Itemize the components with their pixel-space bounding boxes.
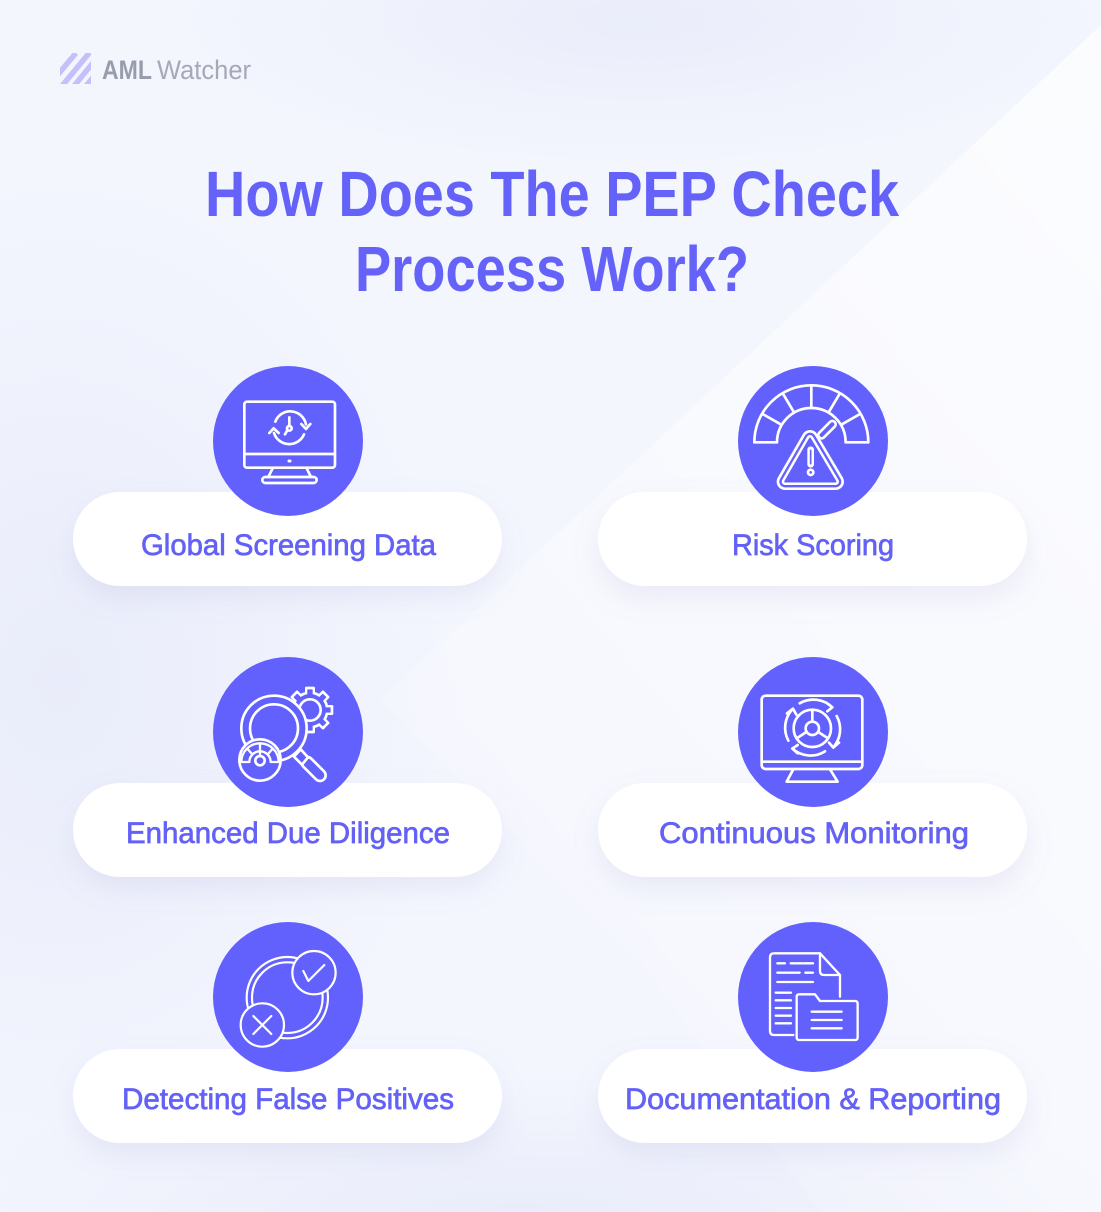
logo mark [60,53,91,84]
label: Enhanced Due Diligence [126,817,450,850]
logo [60,53,251,84]
icon: monitor with cycle [738,657,888,807]
title: How Does The PEP Check [205,158,899,230]
logo: Watcher [157,55,251,85]
icon: document and folder [738,922,888,1072]
icon: check and cross ring [213,922,363,1072]
pill [598,783,1027,877]
icon: gauge with warning [738,366,888,516]
label: Detecting False Positives [122,1083,454,1116]
pill [73,492,502,586]
icon: monitor with clock [213,366,363,516]
label: Global Screening Data [141,529,436,562]
pill [73,783,502,877]
card: Risk Scoring [598,366,1027,586]
card: Detecting False Positives [73,922,502,1143]
title: Process Work? [355,233,749,305]
title [205,158,899,305]
card: Enhanced Due Diligence [73,657,502,877]
card: Documentation & Reporting [598,922,1027,1143]
pill [598,1049,1027,1143]
pill [598,492,1027,586]
icon: magnifier with gear and gauge [213,657,363,807]
label: Continuous Monitoring [659,817,969,850]
label: Risk Scoring [732,529,894,562]
pill [73,1049,502,1143]
card: Continuous Monitoring [598,657,1027,877]
card: Global Screening Data [73,366,502,586]
logo wordmark: AML [102,55,152,85]
label: Documentation & Reporting [625,1083,1001,1116]
